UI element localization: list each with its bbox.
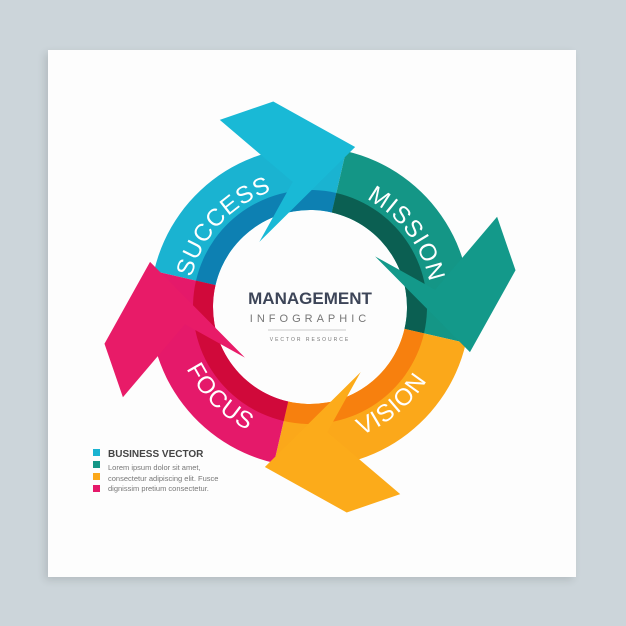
legend xyxy=(93,449,218,493)
label: SUCCESS: SUCCESS xyxy=(177,178,269,276)
center title: INFOGRAPHIC xyxy=(250,313,370,325)
arrowheads xyxy=(94,91,526,523)
segment bodies xyxy=(118,115,502,499)
card xyxy=(48,50,576,577)
label: MISSION: MISSION xyxy=(368,186,445,280)
center title: VECTOR RESOURCE xyxy=(270,337,350,343)
legend: BUSINESS VECTOR xyxy=(108,449,204,460)
legend: Lorem ipsum dolor sit amet, xyxy=(108,463,201,472)
label: VISION: VISION xyxy=(354,372,426,432)
legend: consectetur adipiscing elit. Fusce xyxy=(108,474,218,483)
center title xyxy=(248,289,372,343)
label: FOCUS: FOCUS xyxy=(187,362,253,428)
center title: MANAGEMENT xyxy=(248,289,372,308)
legend: dignissim pretium consectetur. xyxy=(108,484,209,493)
